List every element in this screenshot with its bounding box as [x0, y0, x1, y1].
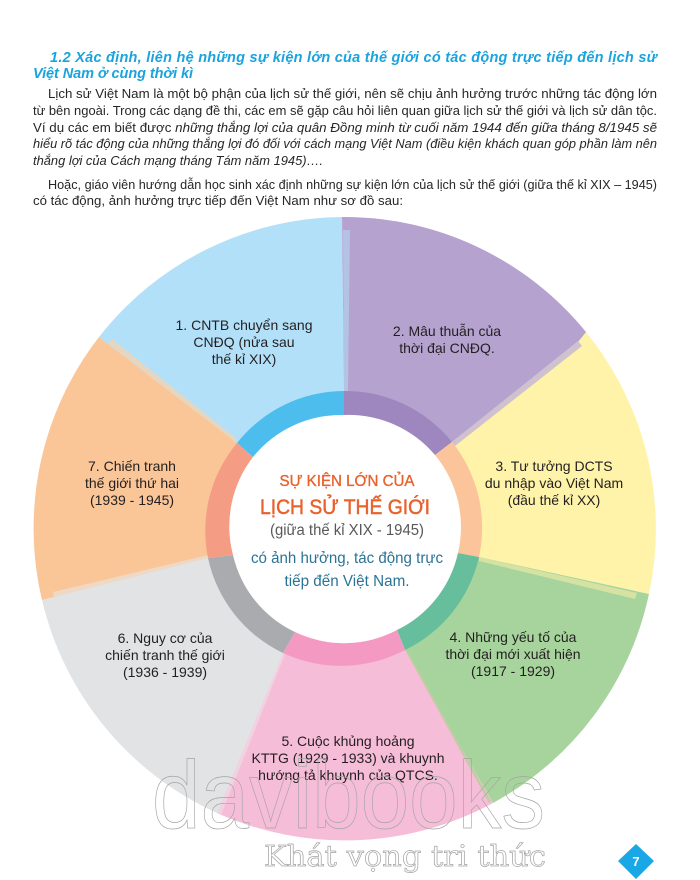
text block: intro paragraph: hiểu rõ tác động của những thắng lợi đó đối với cách mạng Việt Nam (điều kiện khách quan góp phần làm nên — [33, 136, 657, 151]
inner ring — [205, 391, 482, 666]
center title: (giữa thế kỉ XIX - 1945) — [270, 522, 424, 539]
page number badge — [618, 844, 654, 879]
label 4: (1917 - 1929) — [471, 663, 555, 679]
text block: intro paragraph — [33, 86, 657, 168]
sector 3 — [452, 332, 656, 594]
label 3: (đầu thế kỉ XX) — [508, 492, 600, 508]
label 3: du nhập vào Việt Nam — [485, 475, 623, 491]
label 5: 5. Cuộc khủng hoảng — [281, 733, 415, 749]
page number badge: 7 — [632, 854, 640, 869]
sector 4 — [405, 557, 649, 803]
label 1: CNĐQ (nửa sau — [193, 334, 295, 350]
label 7: 7. Chiến tranh — [88, 458, 176, 474]
sector 5 — [217, 650, 493, 840]
label 2: thời đại CNĐQ. — [399, 340, 495, 356]
label 1: 1. CNTB chuyển sang — [176, 317, 312, 333]
center title: có ảnh hưởng, tác động trực — [251, 550, 443, 567]
label 7: (1939 - 1945) — [90, 492, 174, 508]
label 1: thế kỉ XIX) — [212, 351, 276, 367]
label 5: hướng tả khuynh của QTCS. — [258, 767, 438, 783]
heading: section 1.2 — [33, 50, 659, 82]
label 3 — [485, 458, 623, 508]
diagram: world events wheel — [34, 217, 656, 840]
sector 2 — [342, 217, 586, 442]
watermark: Khát vọng tri thức — [264, 839, 546, 873]
text block: intro paragraph: Lịch sử Việt Nam là một bộ phận của lịch sử thế giới, nên sẽ chịu ảnh hưởng trước những tác động lớn — [48, 86, 657, 101]
center circle — [232, 416, 458, 642]
sector labels — [85, 317, 623, 783]
label 2 — [393, 323, 501, 356]
label 7: thế giới thứ hai — [85, 475, 179, 491]
text block: intro paragraph: từ bên ngoài. Trong các dạng đề thi, các em sẽ gặp câu hỏi liên quan giữa lịch sử thế giới và lịch sử dân tộc. — [33, 103, 657, 118]
sector 7 — [34, 337, 237, 600]
text block: second paragraph: Hoặc, giáo viên hướng dẫn học sinh xác định những sự kiện lớn của lịch sử thế giới (giữa thế kỉ XIX – 1945) — [48, 177, 657, 192]
label 4 — [445, 629, 581, 679]
center title: SỰ KIỆN LỚN CỦA — [280, 471, 415, 490]
label 1 — [176, 317, 312, 367]
text block: intro paragraph: Ví dụ các em biết được những thắng lợi của quân Đồng minh từ cuối năm 1944 đến giữa tháng 8/1945 sẽ — [33, 120, 657, 135]
center title: LỊCH SỬ THẾ GIỚI — [260, 494, 430, 519]
overlap slivers — [53, 230, 637, 815]
label 5 — [252, 733, 444, 783]
center title: tiếp đến Việt Nam. — [284, 573, 410, 590]
center title — [251, 471, 443, 590]
text block: second paragraph — [33, 177, 657, 208]
label 3: 3. Tư tưởng DCTS — [495, 458, 613, 474]
heading: section 1.2: 1.2 Xác định, liên hệ những sự kiện lớn của thế giới có tác động trực tiếp đến lịch sử — [50, 50, 659, 66]
text block: second paragraph: có tác động, ảnh hưởng trực tiếp đến Việt Nam như sơ đồ sau: — [33, 193, 403, 208]
label 4: thời đại mới xuất hiện — [445, 646, 581, 662]
label 5: KTTG (1929 - 1933) và khuynh — [252, 750, 444, 766]
label 4: 4. Những yếu tố của — [450, 629, 577, 645]
watermark: davibooks — [152, 742, 545, 849]
label 6 — [105, 630, 225, 680]
sector 1 — [99, 217, 344, 443]
text block: intro paragraph: thắng lợi của Cách mạng tháng Tám năm 1945)…. — [33, 153, 323, 168]
label 2: 2. Mâu thuẫn của — [393, 323, 501, 339]
label 6: (1936 - 1939) — [123, 664, 207, 680]
sector 6 — [42, 558, 283, 813]
label 6: chiến tranh thế giới — [105, 647, 225, 663]
label 7 — [85, 458, 179, 508]
label 6: 6. Nguy cơ của — [118, 630, 213, 646]
heading: section 1.2: Việt Nam ở cùng thời kì — [33, 66, 193, 82]
